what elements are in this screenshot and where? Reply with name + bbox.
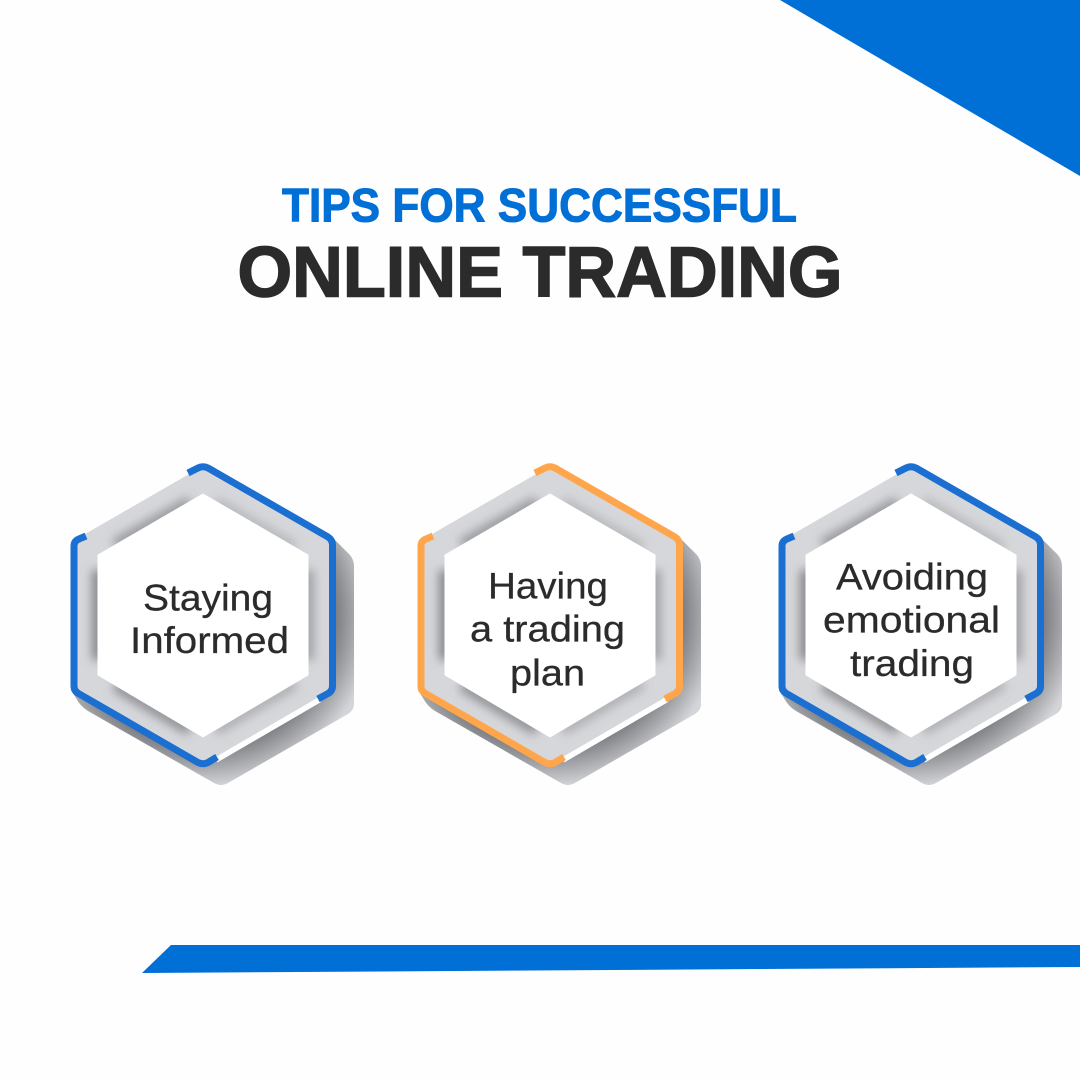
label <box>470 566 625 694</box>
label: a trading <box>470 608 625 650</box>
hexagon: Avoiding emotional trading <box>779 466 1062 785</box>
hexagon: Having a trading plan <box>418 466 701 785</box>
label <box>130 578 289 661</box>
title line 1: TIPS FOR SUCCESSFUL <box>282 179 797 232</box>
bottom bar <box>142 945 1080 973</box>
corner triangle <box>780 0 1080 176</box>
title <box>238 179 842 312</box>
hexagon: Staying Informed <box>71 466 354 785</box>
label: Having <box>488 566 608 606</box>
label <box>823 556 1000 684</box>
label: emotional <box>823 600 1000 640</box>
label: Staying <box>143 578 273 618</box>
title line 2: ONLINE TRADING <box>238 234 842 312</box>
label: Informed <box>130 620 289 661</box>
label: Avoiding <box>836 556 988 598</box>
label: trading <box>850 643 974 684</box>
label: plan <box>510 652 585 694</box>
